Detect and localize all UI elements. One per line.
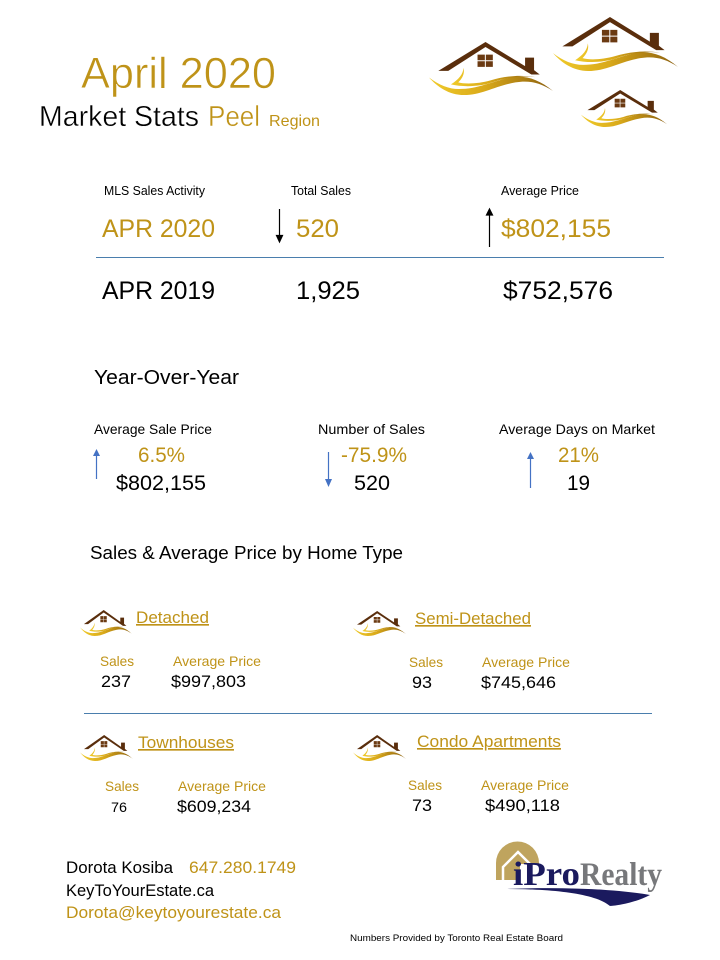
row: April 2019: $752,576 — [503, 277, 613, 305]
panel: condo apartments: $490,118 — [485, 797, 560, 815]
panel: detached: Average Price — [173, 653, 261, 669]
row: April 2019 — [102, 277, 613, 305]
panel: townhouses: Townhouses — [138, 734, 234, 752]
stat: average days on market: 21% — [558, 444, 599, 467]
panel: semi-detached: 93 — [412, 674, 432, 692]
icon: three houses — [429, 17, 678, 127]
stat: number of sales: -75.9% — [341, 444, 407, 467]
header labels: Total Sales — [291, 184, 351, 198]
arrow: price up — [486, 209, 492, 247]
panel: condo apartments — [353, 733, 569, 815]
logo: iPro Realty: iPro — [513, 856, 580, 893]
panel: condo apartments: Condo Apartments — [417, 733, 561, 751]
panel: townhouses: 76 — [111, 799, 127, 815]
arrow: sales down — [276, 209, 282, 242]
source note: Numbers Provided by Toronto Real Estate Board — [350, 933, 563, 944]
stat: number of sales: 520 — [354, 471, 390, 495]
panel: semi-detached: $745,646 — [481, 674, 556, 692]
header labels — [104, 184, 579, 198]
logo: iPro Realty: Realty — [580, 857, 662, 893]
subtitle — [39, 101, 320, 133]
panel: detached: Sales — [100, 653, 134, 669]
panel: semi-detached — [353, 610, 570, 692]
row: April 2020 — [102, 215, 611, 243]
stat: average sale price: $802,155 — [116, 471, 206, 495]
logo: iPro Realty — [496, 842, 662, 906]
panel: townhouses: Sales — [105, 778, 139, 794]
panel: townhouses — [80, 734, 266, 816]
contact details: Dorota Kosiba — [66, 859, 174, 877]
subtitle: Market Stats — [39, 101, 199, 133]
contact details: 647.280.1749 — [189, 859, 296, 877]
panel: detached: $997,803 — [171, 673, 246, 691]
panel: detached: 237 — [101, 673, 131, 691]
panel: semi-detached: Average Price — [482, 654, 570, 670]
stat: number of sales — [318, 421, 425, 495]
row: April 2020: APR 2020 — [102, 215, 215, 243]
stat: number of sales: Number of Sales — [318, 421, 425, 437]
panel: detached — [80, 609, 261, 691]
panel: condo apartments: 73 — [412, 797, 432, 815]
panel: detached: Detached — [136, 609, 209, 627]
contact details — [66, 859, 296, 922]
header labels: MLS Sales Activity — [104, 184, 206, 198]
title: April 2020 — [81, 49, 276, 98]
row: April 2019: 1,925 — [296, 277, 360, 305]
panel: MLS sales activity — [96, 184, 664, 305]
panel: semi-detached: Semi-Detached — [415, 610, 531, 628]
heading: home type: Sales & Average Price by Home Type — [90, 542, 403, 563]
heading: year-over-year: Year-Over-Year — [94, 367, 239, 389]
contact details: Dorota@keytoyourestate.ca — [66, 904, 282, 922]
row: April 2020: $802,155 — [501, 215, 611, 243]
row: April 2020: 520 — [296, 215, 339, 243]
header labels: Average Price — [501, 184, 579, 198]
row: April 2019: APR 2019 — [102, 277, 215, 305]
stat: average sale price — [93, 421, 212, 495]
contact details: KeyToYourEstate.ca — [66, 882, 215, 900]
panel: townhouses: $609,234 — [177, 798, 251, 816]
stat: average days on market: Average Days on Market — [499, 421, 655, 437]
stat: average sale price: 6.5% — [138, 444, 185, 467]
stat: average sale price: Average Sale Price — [94, 421, 212, 437]
panel: townhouses: Average Price — [178, 778, 266, 794]
stat: average days on market — [499, 421, 655, 495]
panel: semi-detached: Sales — [409, 654, 443, 670]
panel: condo apartments: Sales — [408, 777, 442, 793]
stat: average days on market: 19 — [567, 471, 590, 495]
panel: condo apartments: Average Price — [481, 777, 569, 793]
subtitle: Peel — [208, 101, 260, 133]
subtitle: Region — [269, 113, 320, 130]
